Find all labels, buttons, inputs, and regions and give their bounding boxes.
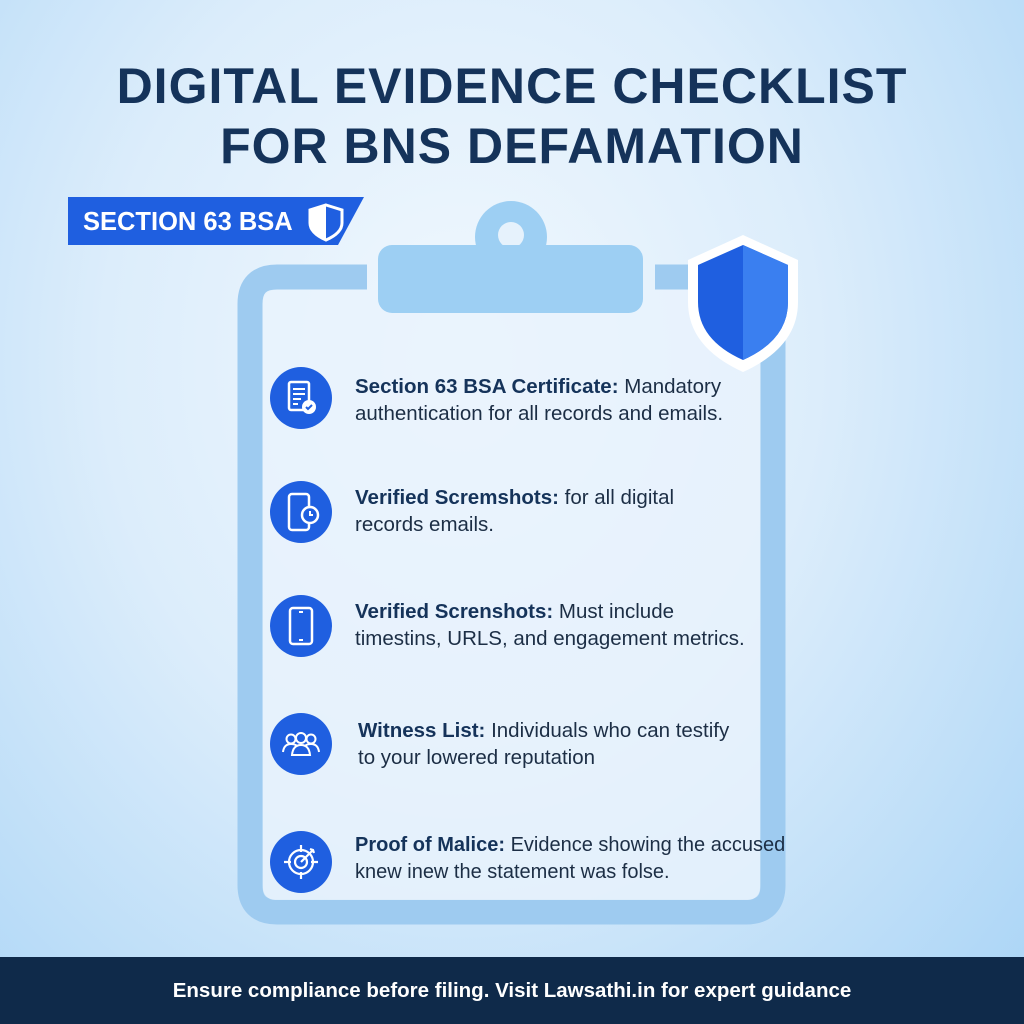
footer — [0, 957, 1024, 1024]
item 2: records emails. — [355, 513, 494, 536]
item 5: knew inew the statement was folse. — [355, 861, 670, 883]
item 5 — [355, 834, 785, 883]
badge: section 63 BSA — [68, 197, 364, 245]
item 2: Verified Scremshots: for all digital — [355, 486, 674, 509]
title: DIGITAL EVIDENCE CHECKLIST — [117, 58, 907, 114]
title — [117, 58, 907, 174]
clipboard — [238, 201, 786, 924]
item 4 — [358, 719, 730, 769]
item 3: Verified Screnshots: Must include — [355, 600, 674, 623]
icon: people — [270, 713, 332, 775]
item 1: authentication for all records and emails. — [355, 402, 723, 425]
item 5: Proof of Malice: Evidence showing the accused — [355, 834, 785, 856]
item 1 — [355, 375, 723, 425]
icon: phone — [270, 595, 332, 657]
item 4: to your lowered reputation — [358, 746, 595, 769]
footer: Ensure compliance before filing. Visit Lawsathi.in for expert guidance — [173, 979, 851, 1002]
item 2 — [355, 486, 674, 536]
item 3: timestins, URLS, and engagement metrics. — [355, 627, 745, 650]
icon: target — [270, 831, 332, 893]
badge: section 63 BSA: SECTION 63 BSA — [83, 208, 293, 236]
item 1: Section 63 BSA Certificate: Mandatory — [355, 375, 721, 398]
item 3 — [355, 600, 745, 650]
icon: shield — [688, 235, 798, 372]
icon: phone clock — [270, 481, 332, 543]
item 4: Witness List: Individuals who can testify — [358, 719, 729, 742]
icon: certificate — [270, 367, 332, 429]
title: FOR BNS DEFAMATION — [220, 118, 804, 174]
